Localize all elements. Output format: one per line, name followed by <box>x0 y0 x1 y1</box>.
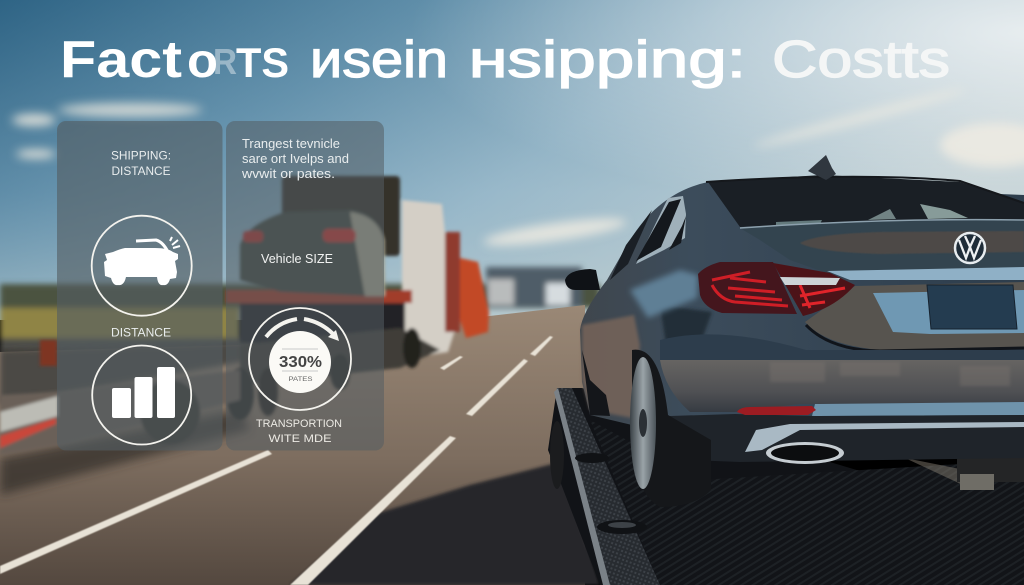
title <box>60 31 950 89</box>
side windows <box>610 196 686 280</box>
blurred car on the truck <box>240 210 385 296</box>
side mirror <box>565 269 600 290</box>
title: ʜsipping: <box>469 31 746 89</box>
title: ᴎsein <box>310 31 448 89</box>
reflector <box>737 406 816 415</box>
label: transportation mode: WITE MDE <box>268 433 332 445</box>
title: Costts <box>772 31 950 89</box>
title: o <box>187 35 218 88</box>
car body <box>580 182 1024 458</box>
sub heading: distance: DISTANCE <box>112 166 171 178</box>
icon: gauge: 330% <box>279 354 322 371</box>
car on flatbed <box>548 155 1024 585</box>
lane markings <box>0 336 553 585</box>
label: transportation mode: TRANSPORTION <box>256 418 342 430</box>
text block: wvwit or pates. <box>241 167 335 181</box>
icon: car <box>92 216 192 316</box>
road <box>0 305 600 585</box>
road shadow <box>290 462 600 585</box>
tail light <box>698 262 855 316</box>
panel: left <box>57 121 222 450</box>
background truck with car <box>0 176 489 455</box>
rear wheel <box>630 350 711 507</box>
label: distance: DISTANCE <box>111 328 171 340</box>
rear window <box>708 175 1024 227</box>
icon: gauge: PATES <box>288 376 313 383</box>
lower bumper <box>670 414 1024 462</box>
lower trunk panel <box>805 282 1024 350</box>
front wheel <box>582 350 610 416</box>
title: R <box>213 41 237 82</box>
flatbed trailer <box>548 388 1024 585</box>
side door reflection <box>582 315 640 418</box>
sky background <box>0 0 1024 320</box>
exhaust <box>766 442 844 464</box>
VW badge <box>955 233 985 263</box>
distant landscape <box>0 267 600 352</box>
chrome trunk strip <box>827 267 1024 280</box>
shark fin antenna <box>808 155 836 180</box>
text block <box>241 137 349 181</box>
text block: Trangest tevnicle <box>242 137 340 151</box>
title: TS <box>236 39 289 86</box>
icon: bar chart <box>92 346 191 444</box>
trunk lid <box>740 220 1024 274</box>
label: vehicle size: Vehicle SIZE <box>261 252 333 266</box>
icon: gauge <box>249 308 351 410</box>
label: transportation mode <box>256 418 342 445</box>
bumper <box>660 360 1024 412</box>
left trailer <box>0 370 240 455</box>
panel: right <box>226 121 384 450</box>
clouds <box>12 84 1024 251</box>
heading: shipping distance: SHIPPING: <box>111 150 171 162</box>
licence plate <box>927 285 1017 329</box>
title: Fact <box>60 31 182 89</box>
text block: sare ort Ivelps and <box>242 152 349 166</box>
